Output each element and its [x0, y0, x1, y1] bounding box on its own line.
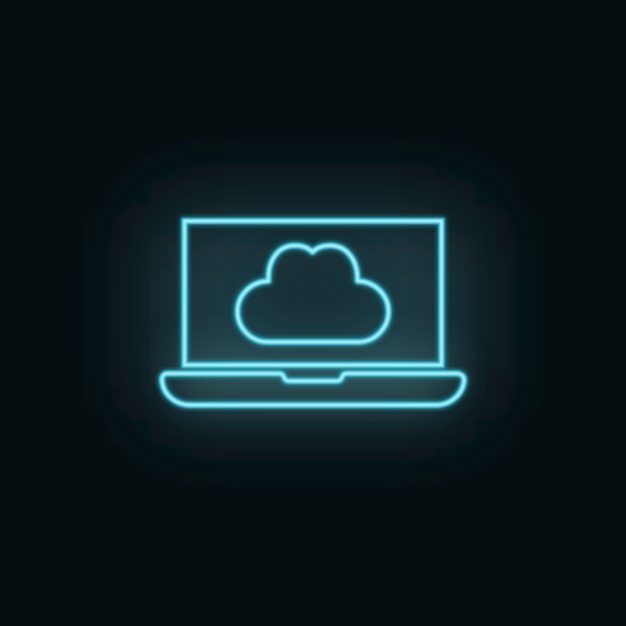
laptop screen	[184, 221, 442, 365]
ambient glow	[150, 205, 476, 420]
cloud icon	[238, 246, 388, 342]
laptop base	[162, 374, 464, 405]
